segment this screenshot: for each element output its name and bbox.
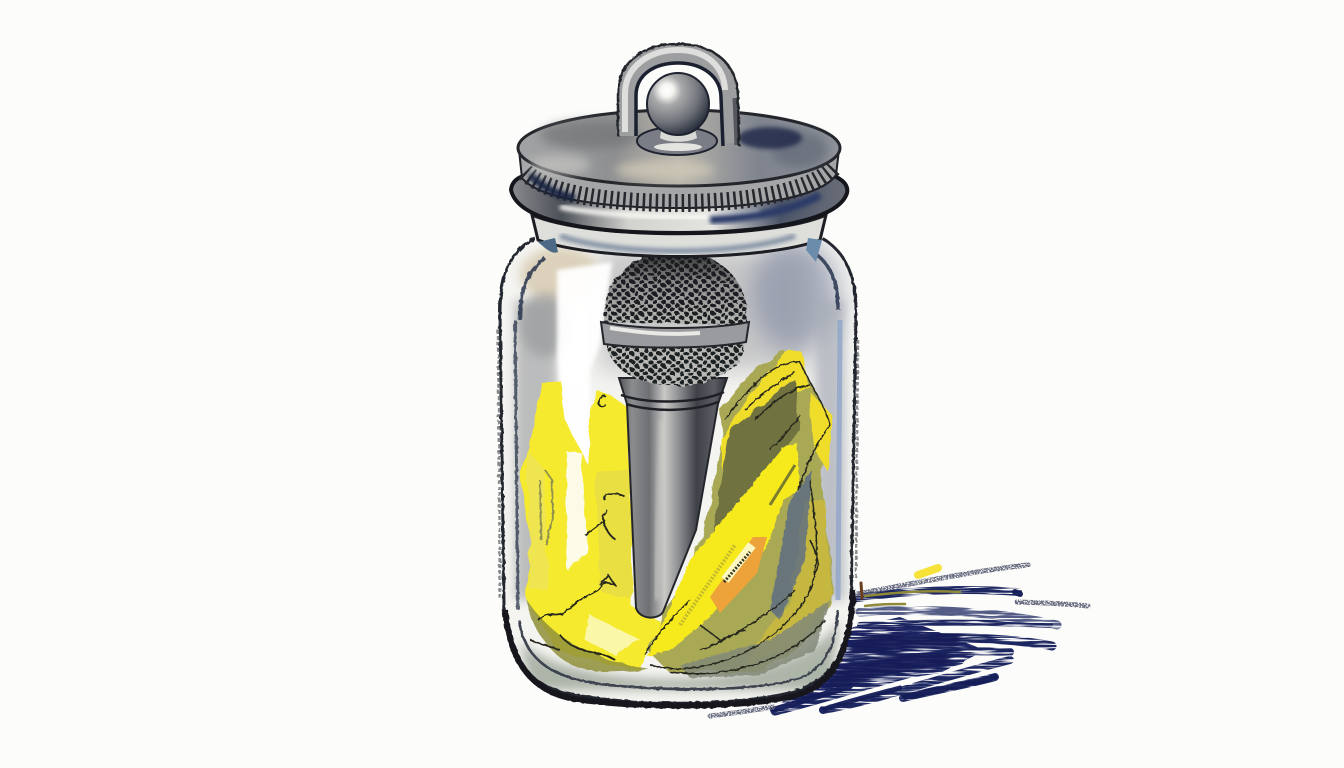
lid: [511, 44, 847, 233]
lid top: [518, 110, 840, 186]
mic band: [601, 322, 749, 348]
yellow paper left: [520, 382, 663, 672]
cast shadow scribble: [710, 565, 1088, 716]
jar glass: [500, 238, 856, 703]
lid ribbed band: [519, 150, 839, 208]
jar inner wall: [520, 250, 838, 320]
handle arch: [627, 53, 731, 143]
jar outline: [498, 238, 858, 706]
microphone: [601, 252, 749, 618]
ink scribbles: [530, 395, 625, 660]
lid flange: [511, 174, 847, 233]
jar neck: [532, 215, 826, 262]
mic grille: [603, 252, 748, 386]
jar body: [498, 238, 858, 706]
knob: [637, 127, 717, 155]
glass washes: [515, 240, 845, 690]
mic handle: [619, 378, 727, 618]
yellow paper right: [645, 350, 833, 678]
